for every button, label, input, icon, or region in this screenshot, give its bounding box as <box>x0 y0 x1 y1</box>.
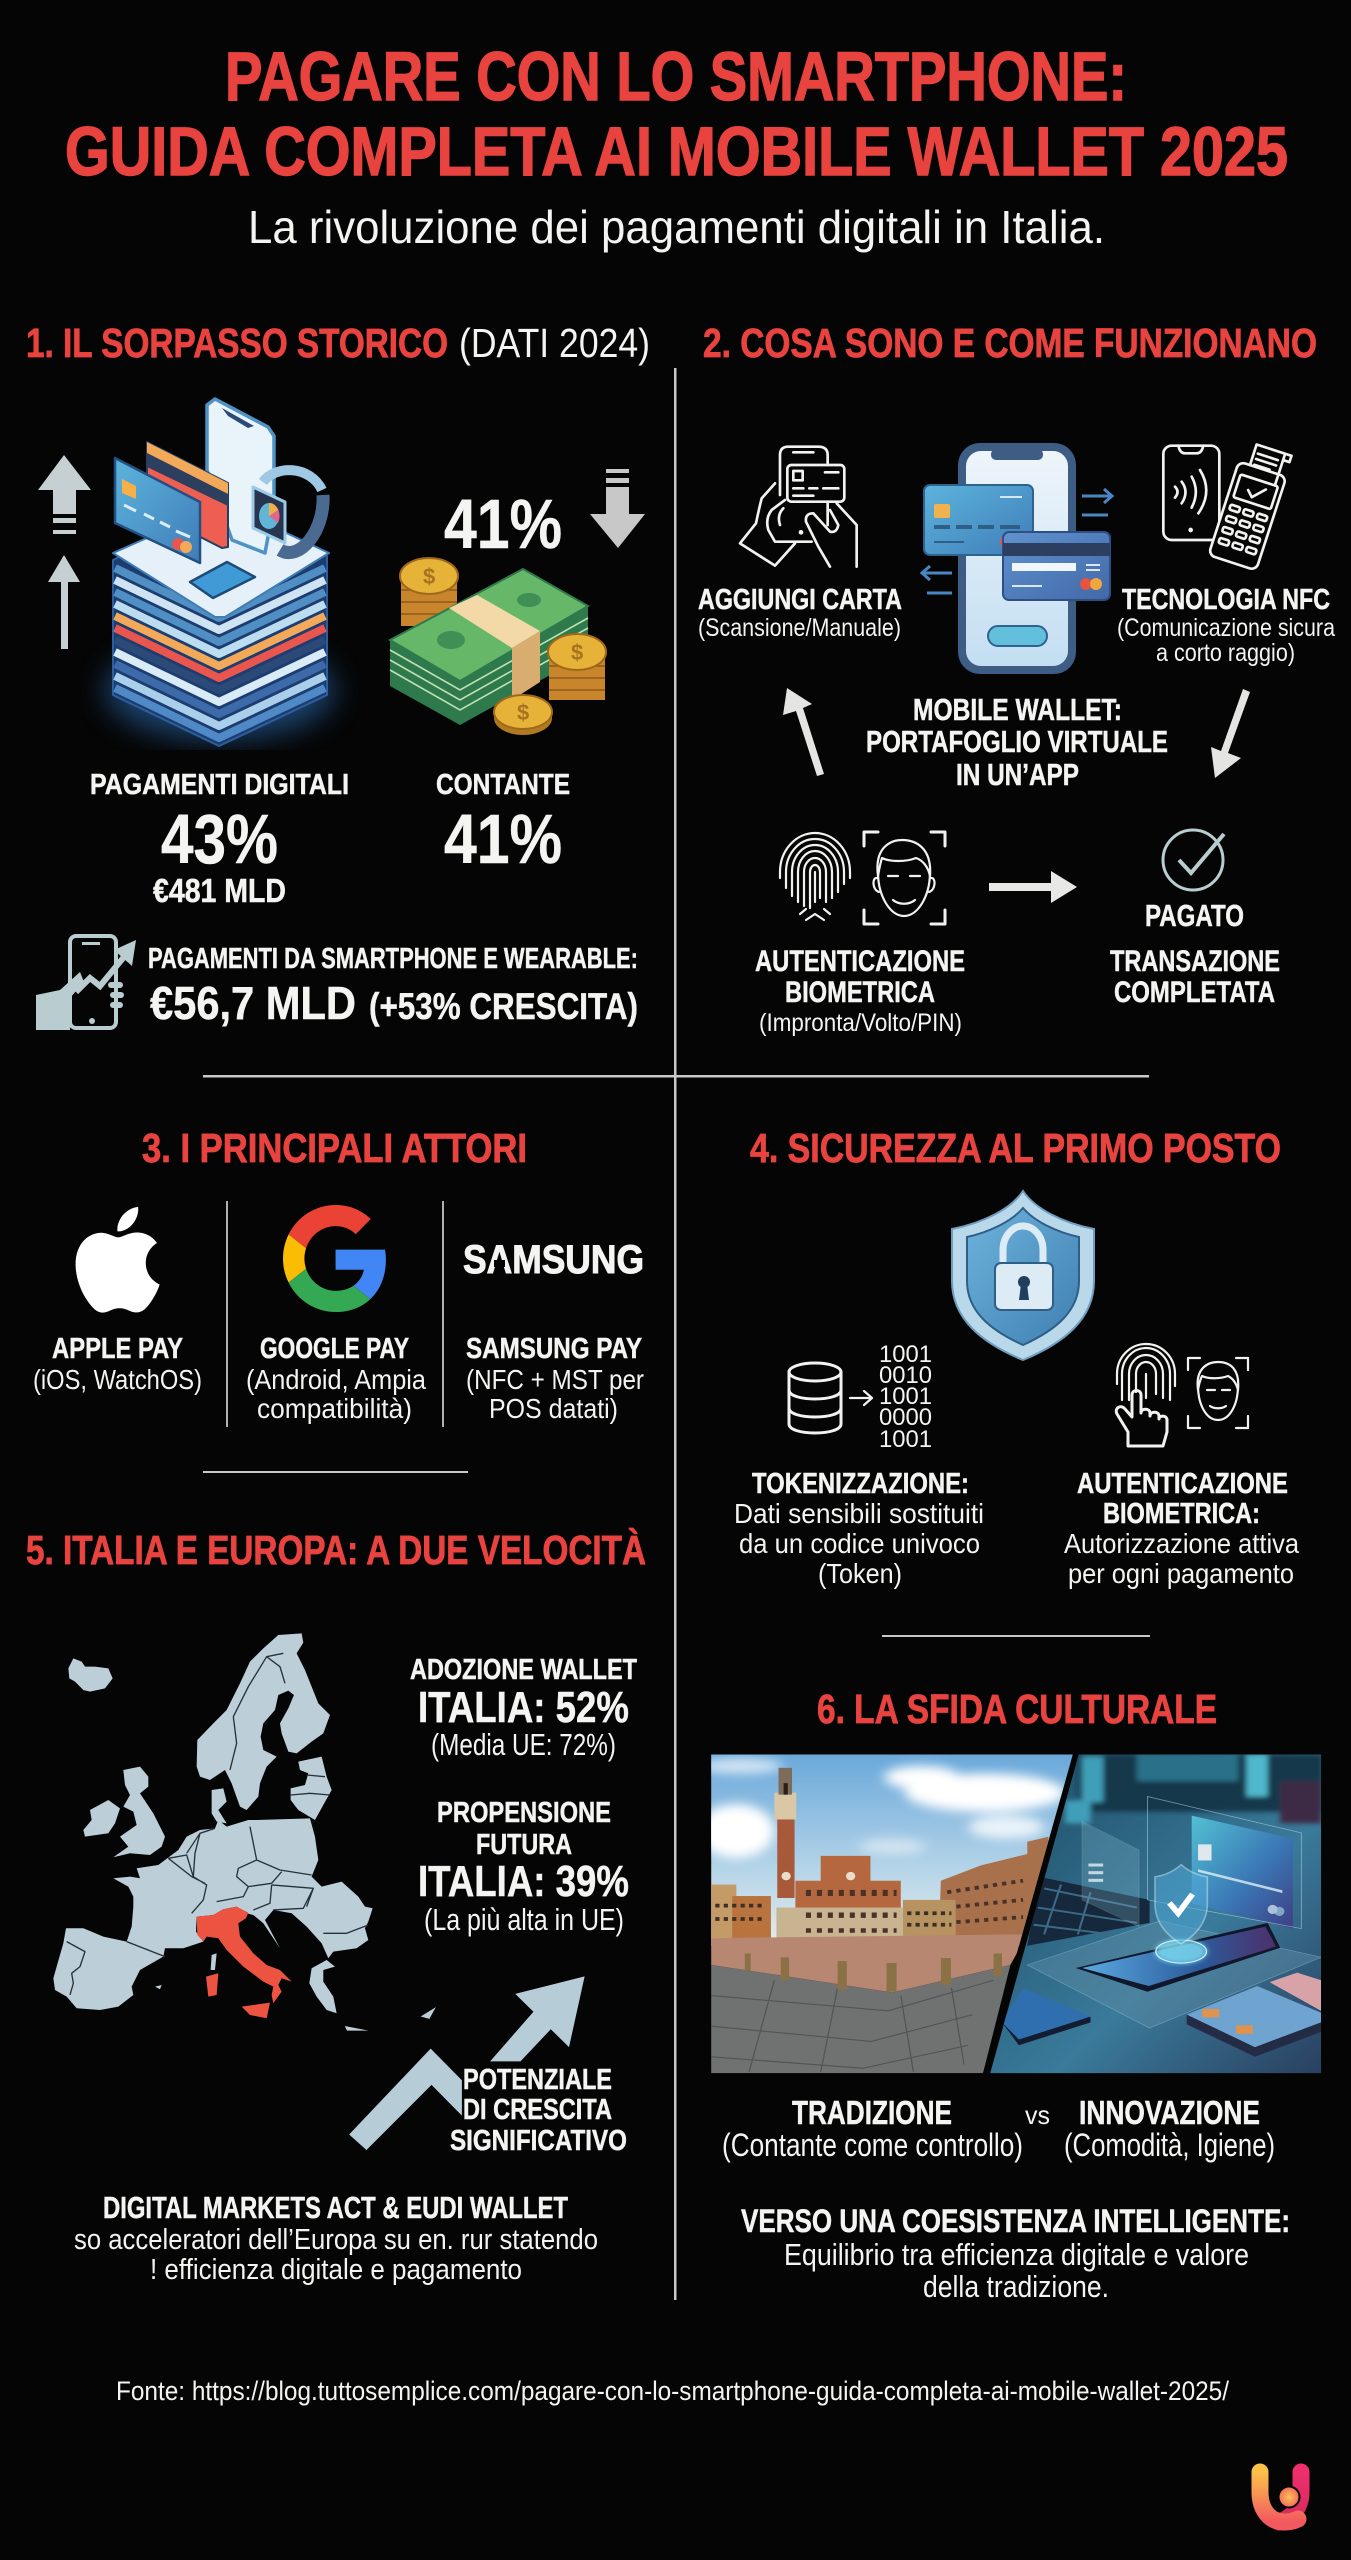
icon: logo <box>1260 2472 1301 2522</box>
binary token <box>879 1341 932 1453</box>
stat: pagamenti digitali: PAGAMENTI DIGITALI <box>90 769 349 801</box>
label: autenticazione biometrica: AUTENTICAZIONE <box>755 945 965 978</box>
stat: wallet adoption <box>410 1654 637 1762</box>
text: coexistence <box>741 2203 1290 2304</box>
text: autenticazione biometrica: BIOMETRICA: <box>1103 1498 1260 1530</box>
watch <box>263 470 322 490</box>
heading: section 6: 6. LA SFIDA CULTURALE <box>817 1686 1217 1732</box>
text: tokenizzazione <box>734 1468 984 1589</box>
stat: wallet adoption: ITALIA: 52% <box>418 1683 629 1732</box>
arrow: growth <box>349 1976 585 2150</box>
icon: samsung logo: SAMSUNG <box>463 1238 644 1282</box>
icon: tokenization database <box>789 1363 872 1433</box>
label: innovazione <box>1064 2094 1275 2163</box>
stat: pagamenti digitali <box>90 769 349 909</box>
label: aggiungi carta: (Scansione/Manuale) <box>698 614 901 642</box>
text: tokenizzazione: TOKENIZZAZIONE: <box>752 1468 969 1500</box>
label: tradizione: TRADIZIONE <box>792 2094 952 2131</box>
stat: future propensity: FUTURA <box>476 1829 572 1861</box>
binary token: 1001 <box>879 1341 932 1368</box>
stat: smartphone and wearable payments: €56,7 MLD <box>150 977 356 1029</box>
icon: fingerprint touch <box>1116 1344 1175 1446</box>
label: vs: vs <box>1025 2100 1050 2130</box>
stat: pagamenti digitali: €481 MLD <box>153 872 286 909</box>
binary token: 0010 <box>879 1362 932 1389</box>
subtitle: La rivoluzione dei pagamenti digitali in Italia. <box>248 201 1105 253</box>
player: apple pay <box>33 1333 202 1395</box>
player: google pay <box>246 1333 426 1424</box>
icon: cash and coins: $ <box>423 564 435 589</box>
player: samsung pay <box>466 1333 644 1424</box>
player: google pay: GOOGLE PAY <box>260 1333 409 1365</box>
label: aggiungi carta: AGGIUNGI CARTA <box>698 584 902 616</box>
scene: digital payment <box>985 1754 1322 2076</box>
stat: contante: 41% <box>444 800 562 878</box>
text: tokenizzazione: da un codice univoco <box>739 1528 980 1559</box>
icon: cash and coins <box>390 558 606 735</box>
label: growth potential: DI CRESCITA <box>463 2094 612 2126</box>
player: google pay: compatibilità) <box>257 1393 412 1424</box>
icon: add card with hands <box>740 447 857 567</box>
icon: NFC phone and POS <box>1163 441 1293 570</box>
label: growth potential: SIGNIFICATIVO <box>450 2125 627 2157</box>
player: samsung pay: SAMSUNG PAY <box>466 1333 642 1365</box>
player: samsung pay: POS datati) <box>489 1393 618 1424</box>
stat: pagamenti digitali: 43% <box>161 800 278 878</box>
title: PAGARE CON LO SMARTPHONE: <box>225 38 1127 115</box>
icon: digital payments stack <box>105 399 335 746</box>
label: aggiungi carta <box>698 584 902 642</box>
arrow: to payment <box>989 871 1077 903</box>
icon: central phone with cards <box>922 443 1112 674</box>
text: coexistence: della tradizione. <box>923 2269 1109 2304</box>
label: tecnologia NFC <box>1117 584 1335 667</box>
icon: check <box>1163 830 1224 890</box>
player: google pay: (Android, Ampia <box>246 1364 426 1395</box>
label: innovazione: (Comodità, Igiene) <box>1064 2127 1275 2163</box>
image: tradition vs innovation <box>698 1754 1322 2076</box>
icon: face frame <box>1188 1358 1248 1428</box>
title <box>65 38 1288 190</box>
icon: down arrow <box>590 469 645 548</box>
map: eastern islands <box>345 2007 436 2031</box>
stat: wallet adoption: (Media UE: 72%) <box>431 1727 616 1762</box>
map: Europe with Italy highlighted <box>53 1633 373 2018</box>
label: autenticazione biometrica: (Impronta/Volto/PIN) <box>759 1009 962 1037</box>
source: Fonte: https://blog.tuttosemplice.com/pagare-con-lo-smartphone-guida-completa-ai-mobile-wallet-2025/ <box>116 2376 1229 2406</box>
binary token: 1001 <box>879 1426 932 1453</box>
icon: smartphone growth <box>36 936 136 1030</box>
label: autenticazione biometrica: BIOMETRICA <box>785 976 935 1009</box>
binary token: 1001 <box>879 1383 932 1410</box>
label: autenticazione biometrica <box>755 945 965 1037</box>
heading: section 5: 5. ITALIA E EUROPA: A DUE VELOCITÀ <box>26 1527 646 1573</box>
label: mobile wallet: MOBILE WALLET: <box>913 692 1122 727</box>
binary token: 0000 <box>879 1404 932 1431</box>
label: mobile wallet <box>866 692 1168 792</box>
scene: Siena piazza <box>698 1754 1074 2073</box>
label: innovazione: INNOVAZIONE <box>1079 2094 1260 2131</box>
heading: section 3: 3. I PRINCIPALI ATTORI <box>142 1125 527 1171</box>
stat: contante: CONTANTE <box>436 769 570 801</box>
icon: google logo <box>283 1205 386 1312</box>
stat: future propensity <box>418 1797 629 1937</box>
icon: cash and coins: $ <box>517 700 529 725</box>
stat: future propensity: ITALIA: 39% <box>418 1857 629 1906</box>
icon: security shield <box>952 1191 1094 1360</box>
player: apple pay: APPLE PAY <box>52 1333 183 1365</box>
label: growth potential <box>450 2064 627 2157</box>
text: tokenizzazione: Dati sensibili sostituiti <box>734 1498 984 1529</box>
label: growth potential: POTENZIALE <box>463 2064 612 2096</box>
text: autenticazione biometrica <box>1064 1468 1299 1589</box>
player: samsung pay: (NFC + MST per <box>466 1364 644 1395</box>
label: tradizione <box>722 2094 1023 2163</box>
text: autenticazione biometrica: per ogni pagamento <box>1068 1558 1294 1589</box>
label: tecnologia NFC: a corto raggio) <box>1156 639 1295 667</box>
label: pagato: PAGATO <box>1145 898 1244 933</box>
icon: up arrows <box>38 455 91 649</box>
icon: fingerprint <box>780 833 850 920</box>
arrow: to add card <box>783 688 824 776</box>
text: tokenizzazione: (Token) <box>818 1558 902 1589</box>
label: transazione completata: TRANSAZIONE <box>1110 945 1280 978</box>
label: mobile wallet: IN UN’APP <box>956 757 1079 792</box>
text: autenticazione biometrica: Autorizzazione attiva <box>1064 1528 1299 1559</box>
stat: smartphone and wearable payments <box>148 943 638 1029</box>
text: coexistence: Equilibrio tra efficienza digitale e valore <box>784 2237 1249 2272</box>
player: apple pay: (iOS, WatchOS) <box>33 1364 202 1395</box>
icon: apple logo <box>76 1207 160 1313</box>
stat: smartphone and wearable payments: (+53% CRESCITA) <box>369 986 638 1027</box>
icon: cash and coins: $ <box>571 640 583 665</box>
label: transazione completata <box>1110 945 1280 1009</box>
text: digital markets act <box>74 2190 598 2286</box>
stat: future propensity: (La più alta in UE) <box>424 1902 624 1937</box>
heading: section 1: 1. IL SORPASSO STORICO <box>26 320 448 366</box>
text: digital markets act: DIGITAL MARKETS ACT & EUDI WALLET <box>103 2190 568 2225</box>
icon: face scan <box>864 832 945 924</box>
label: transazione completata: COMPLETATA <box>1114 976 1275 1009</box>
stat: future propensity: PROPENSIONE <box>437 1797 611 1829</box>
stat: 41% top: 41% <box>444 485 562 563</box>
text: digital markets act: ! efficienza digitale e pagamento <box>150 2254 522 2286</box>
heading: section 1: (DATI 2024) <box>459 320 650 366</box>
text: autenticazione biometrica: AUTENTICAZIONE <box>1077 1468 1288 1500</box>
text: digital markets act: so acceleratori dell’Europa su en. rur statendo <box>74 2224 598 2256</box>
stat: smartphone and wearable payments: PAGAMENTI DA SMARTPHONE E WEARABLE: <box>148 943 638 975</box>
stat: wallet adoption: ADOZIONE WALLET <box>410 1654 637 1686</box>
label: mobile wallet: PORTAFOGLIO VIRTUALE <box>866 724 1168 759</box>
arrow: to transaction <box>1211 689 1250 778</box>
label: tradizione: (Contante come controllo) <box>722 2127 1023 2163</box>
stat: contante <box>436 769 570 878</box>
